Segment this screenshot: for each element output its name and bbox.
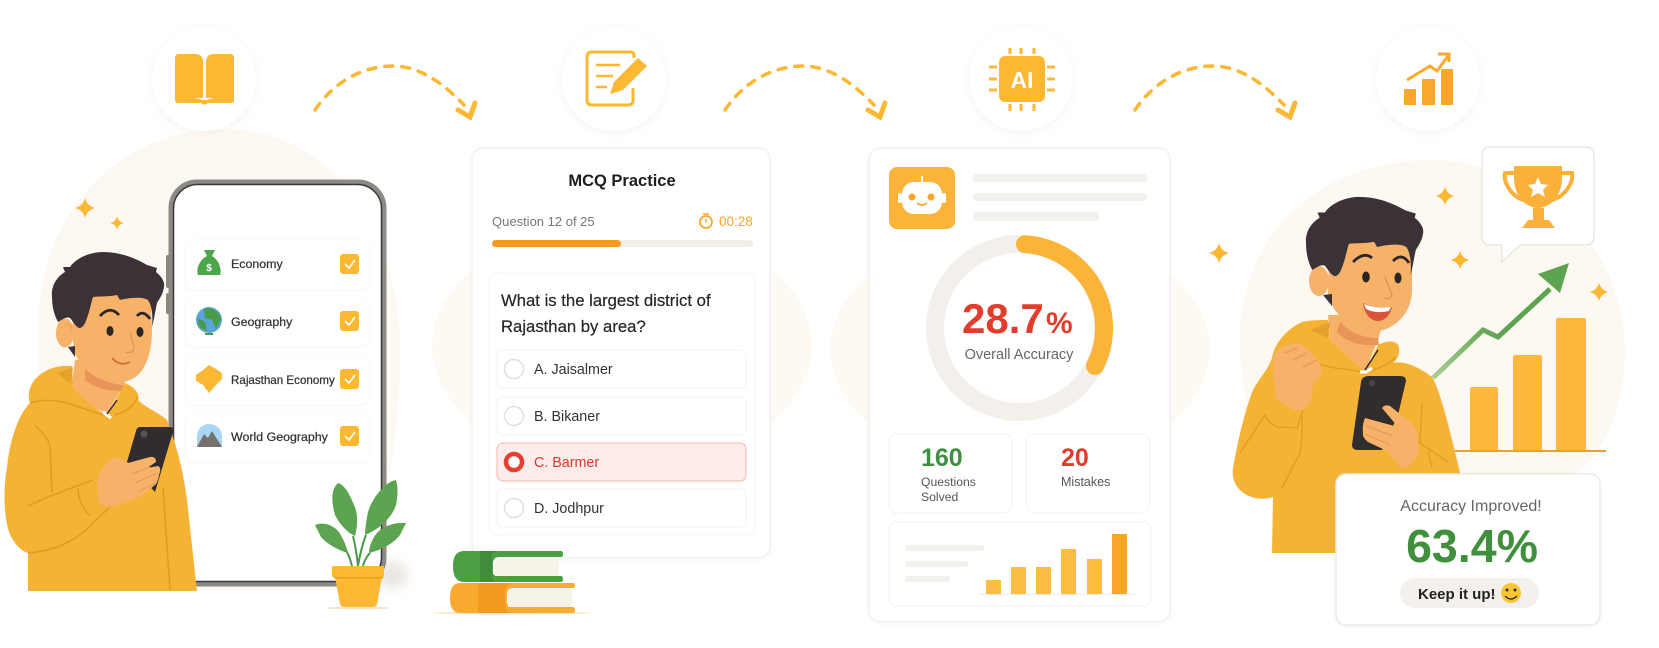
background blob: step 1	[38, 129, 400, 590]
icon circle: open book	[152, 27, 256, 131]
heading: MCQ Practice	[568, 172, 676, 190]
option B: B. Bikaner	[534, 409, 600, 425]
row: Geography	[186, 298, 369, 346]
option D	[497, 489, 746, 527]
phone shadow	[376, 561, 408, 589]
stack of books	[432, 551, 592, 614]
dashed arrow 3	[1135, 66, 1295, 117]
question counter: Question 12 of 25	[492, 214, 595, 229]
trophy icon	[1505, 166, 1572, 228]
timer: 00:28	[719, 214, 753, 229]
row: Economy: Economy	[231, 257, 283, 271]
card: accuracy improved: 63.4%	[1406, 520, 1538, 572]
person with phone	[5, 252, 197, 591]
dashed arrow 1	[315, 66, 475, 117]
progress bar	[492, 240, 753, 247]
mini bar chart	[889, 522, 1151, 606]
question box: Rajasthan by area?	[501, 317, 646, 336]
stat: mistakes: Mistakes	[1061, 475, 1110, 489]
icon circle: notes and pencil	[562, 27, 666, 131]
icon circle: AI chip: AI	[1010, 67, 1034, 93]
stat: questions solved: Solved	[921, 490, 958, 504]
background blob: step 2	[432, 222, 812, 470]
hand	[97, 457, 160, 507]
green growth arrow	[1433, 263, 1569, 378]
icon circle: AI chip	[969, 27, 1073, 131]
dashed arrow 2	[725, 66, 885, 117]
placeholder text lines	[973, 174, 1147, 221]
sparkles left	[75, 198, 124, 230]
row: World Geography	[186, 413, 369, 461]
phone	[1352, 376, 1406, 450]
fist	[1273, 343, 1322, 410]
celebrating person	[1233, 197, 1460, 553]
row: Geography: Geography	[231, 315, 293, 329]
row: World Geography: World Geography	[231, 430, 329, 444]
option A	[497, 350, 746, 388]
encouragement pill	[1400, 578, 1539, 608]
phone in hand	[127, 427, 173, 492]
panel: MCQ practice card	[472, 148, 770, 558]
phone with topic list	[166, 182, 384, 584]
stat: questions solved: 160	[921, 444, 963, 472]
stat: mistakes: 20	[1061, 444, 1089, 472]
question box: What is the largest district of	[501, 291, 711, 310]
head	[1306, 197, 1423, 331]
timer	[700, 214, 753, 229]
card: accuracy improved: Accuracy Improved!	[1400, 498, 1542, 515]
card: accuracy improved	[1336, 474, 1600, 625]
sparkles right	[1209, 187, 1608, 301]
background blob: step 4	[1240, 160, 1625, 480]
head	[52, 252, 164, 383]
background blob: step 3	[830, 228, 1210, 472]
option D: D. Jodhpur	[534, 501, 604, 517]
trophy speech bubble	[1482, 147, 1594, 262]
stat: questions solved: Questions	[921, 475, 976, 489]
option C selected	[497, 443, 746, 481]
panel: AI analysis card	[869, 148, 1170, 622]
stat: mistakes	[1026, 434, 1150, 513]
hand	[1363, 405, 1419, 468]
option A: A. Jaisalmer	[534, 362, 613, 378]
row: Rajasthan Economy	[186, 356, 369, 404]
plant in pot	[315, 480, 406, 610]
accuracy ring: Overall Accuracy	[965, 347, 1074, 363]
icon circle: growth chart	[1376, 27, 1480, 131]
robot icon	[889, 167, 955, 229]
question box	[489, 273, 755, 535]
encouragement pill: Keep it up!	[1418, 586, 1496, 603]
option B	[497, 397, 746, 435]
accuracy ring	[935, 244, 1104, 412]
row: Economy	[186, 240, 369, 289]
option C selected: C. Barmer	[534, 455, 599, 471]
accuracy ring: 28.7	[962, 295, 1044, 342]
stat: questions solved	[889, 434, 1012, 513]
row: Rajasthan Economy: Rajasthan Economy	[231, 374, 335, 387]
accuracy ring: %	[1046, 307, 1073, 340]
result bar chart	[1455, 318, 1606, 452]
row: Economy: $	[206, 263, 212, 274]
